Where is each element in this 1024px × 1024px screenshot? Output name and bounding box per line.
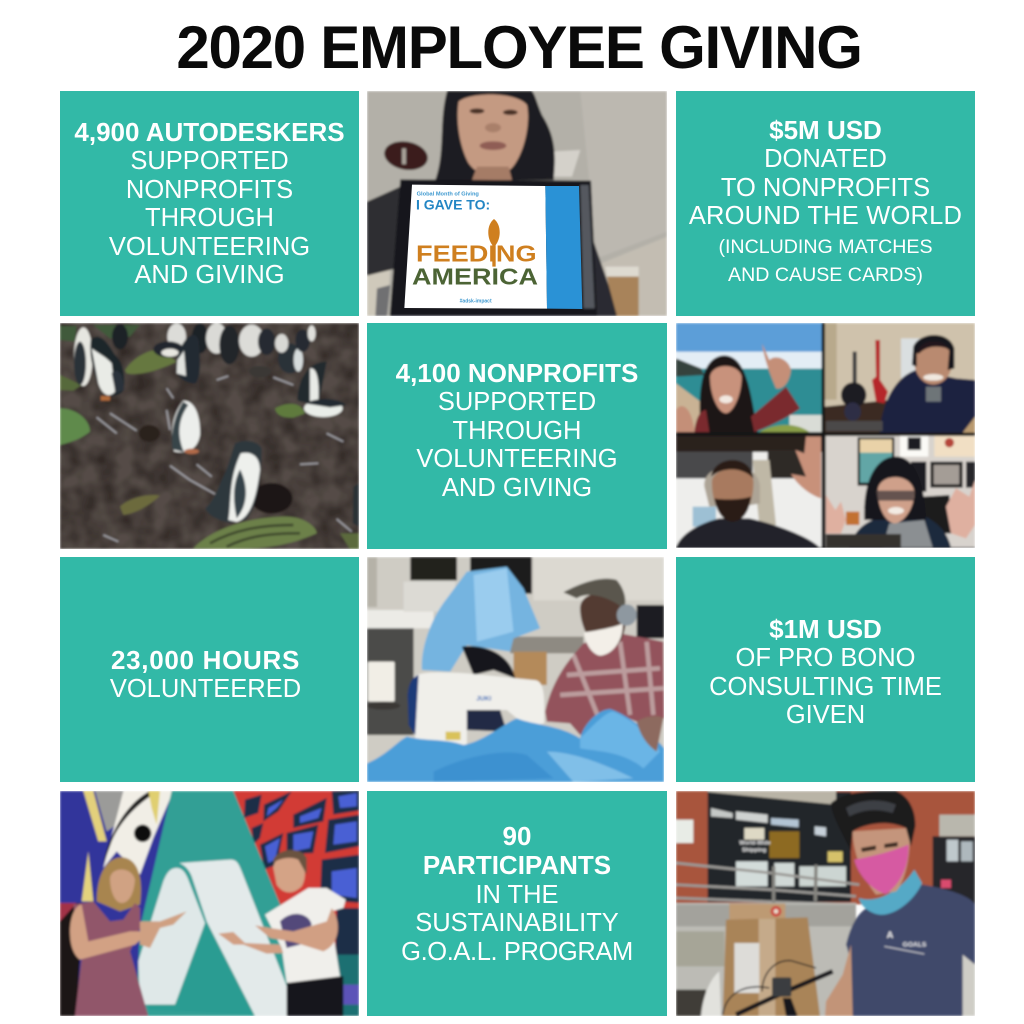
panel text: AND CAUSE CARDS) (728, 264, 923, 286)
call tile: man with headphones (676, 436, 822, 547)
building (676, 791, 975, 905)
panel text: 90 (503, 821, 531, 851)
mural left (60, 791, 173, 1016)
panel text: SUPPORTED (130, 147, 289, 175)
pavement (676, 903, 856, 1016)
building: Shipping (742, 847, 767, 853)
panel: 4,100 nonprofits (367, 323, 667, 549)
logo (135, 791, 290, 1016)
cyclist (825, 791, 975, 1016)
laptop slide: I GAVE TO: (416, 197, 490, 213)
panel text: 4,900 AUTODESKERS (74, 117, 345, 147)
panel text: VOLUNTEERING (416, 445, 618, 473)
panel text: 23,000 HOURS (111, 645, 300, 675)
sewing machine (408, 672, 544, 747)
panel text: VOLUNTEERED (110, 675, 301, 703)
panel text: PARTICIPANTS (423, 850, 611, 880)
panel: $5M USD (676, 91, 975, 316)
laptop slide: FEEDING (416, 241, 537, 267)
laptop slide: Global Month of Giving (417, 192, 479, 198)
back row penguins (74, 323, 316, 386)
panel text: OF PRO BONO (736, 644, 915, 672)
panel text: 4,100 NONPROFITS (396, 358, 638, 388)
cyclist: A (887, 930, 894, 940)
panel text: (INCLUDING MATCHES (718, 236, 933, 258)
thread spool (368, 662, 395, 702)
panel: 90 participants (367, 791, 667, 1016)
panel text: AND GIVING (134, 261, 285, 289)
cyclist: GOALS (903, 941, 927, 948)
panel text (709, 614, 942, 729)
call tile: woman with glasses (826, 436, 975, 547)
large left penguin (90, 337, 124, 401)
center penguin (172, 401, 200, 454)
mural right (233, 791, 359, 1016)
grass tufts (60, 325, 140, 342)
cardboard boxes (723, 904, 820, 1016)
dividing lines (676, 323, 975, 549)
panel text: SUPPORTED (438, 388, 596, 416)
call tile: man with guitars (825, 323, 975, 433)
photo: penguins (60, 323, 359, 549)
panel text (74, 117, 345, 289)
railing (676, 863, 859, 905)
woman left (70, 857, 187, 1016)
building: World-Wide (739, 841, 771, 847)
panel text: IN THE (475, 881, 559, 909)
woman right (218, 850, 346, 1016)
panel: 4,900 Autodeskers (60, 91, 359, 316)
photo: two women pointing at Autodesk logo (60, 791, 359, 1016)
foreground penguin (205, 441, 262, 523)
panel text: AROUND THE WORLD (689, 202, 962, 230)
panel text (689, 115, 962, 286)
panel: $1M USD (676, 557, 975, 782)
title: 2020 EMPLOYEE GIVING (176, 14, 862, 81)
blue fabric (367, 709, 664, 782)
panel text (110, 645, 301, 703)
panel text (401, 821, 633, 966)
panel text: CONSULTING TIME (709, 673, 942, 701)
panel text: THROUGH (145, 204, 274, 232)
penguin second in row (176, 335, 200, 383)
laptop slide: AMERICA (412, 263, 538, 289)
panel: 23,000 hours (60, 557, 359, 782)
panel text: GIVEN (786, 701, 865, 729)
panel text: $5M USD (769, 115, 882, 145)
photo: video call with four people waving (676, 323, 975, 548)
panel text: VOLUNTEERING (109, 233, 310, 261)
panel text: SUSTAINABILITY (415, 909, 619, 937)
panel text (396, 358, 638, 502)
panel text: DONATED (764, 145, 887, 173)
white guano streaks (97, 376, 352, 542)
call tile: woman at beach (676, 323, 822, 432)
panel text: THROUGH (453, 417, 581, 445)
sewing machine: JUKI (476, 695, 492, 702)
panel text: G.O.A.L. PROGRAM (401, 938, 633, 966)
panel text: NONPROFITS (126, 176, 293, 204)
panel text: TO NONPROFITS (721, 174, 930, 202)
worker (545, 579, 664, 735)
photo: worker at sewing machine (367, 557, 664, 782)
laptop slide (404, 185, 582, 309)
laptop slide: #adsk-impact (460, 298, 492, 304)
burrow (251, 483, 292, 514)
handlebar (736, 971, 833, 1015)
panel text: AND GIVING (442, 474, 592, 502)
right penguin (297, 362, 347, 417)
photo: cyclist with cargo bike in front of shops (676, 791, 975, 1016)
panel text: $1M USD (769, 614, 882, 644)
photo: woman holding laptop with Feeding America sign (367, 91, 667, 316)
bottom white edge (676, 548, 975, 549)
